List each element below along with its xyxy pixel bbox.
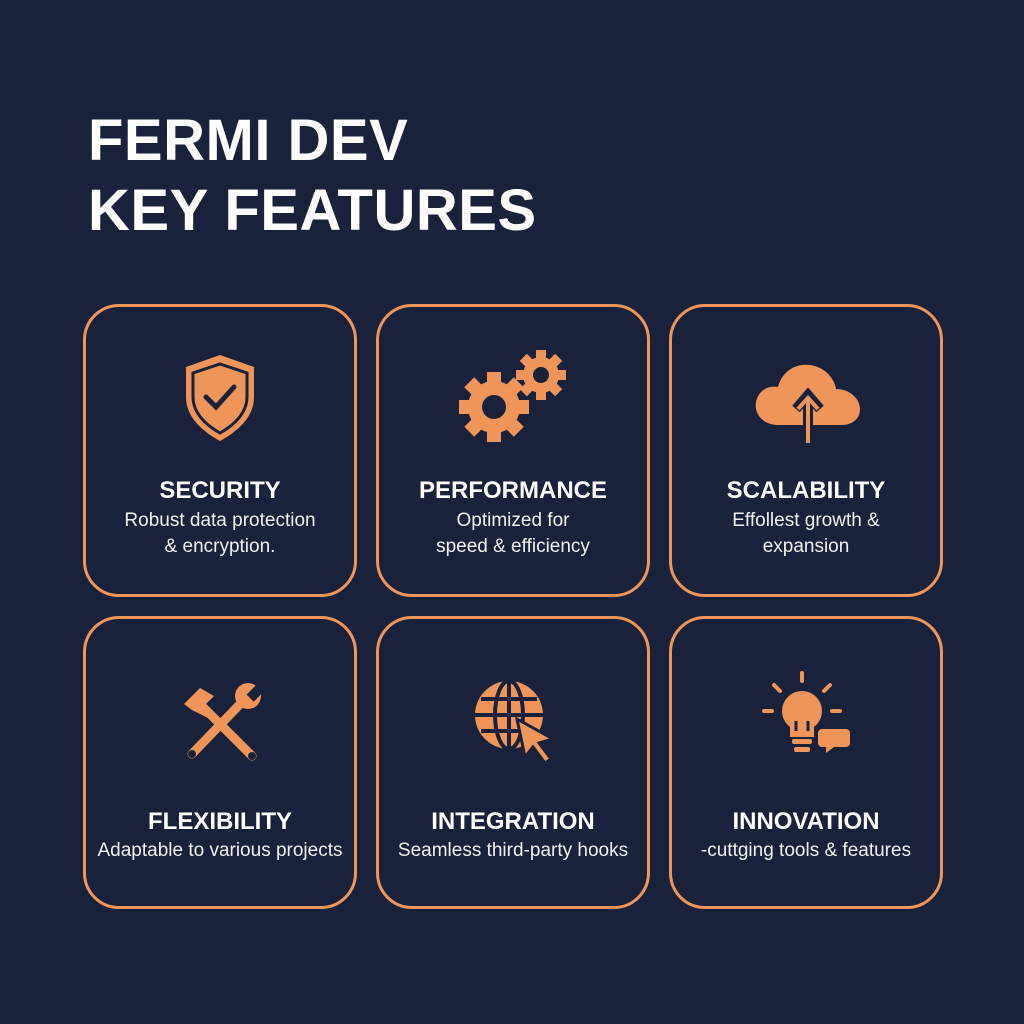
panel: integration	[376, 616, 650, 909]
icon: tools	[184, 683, 261, 760]
description: Seamless third-party hooks	[398, 840, 628, 861]
icon: shield	[186, 355, 254, 441]
description	[436, 510, 590, 557]
description: -cuttging tools & features	[701, 840, 911, 861]
description: Adaptable to various projects	[97, 840, 343, 861]
heading: INTEGRATION	[431, 808, 595, 835]
title: FERMI DEV	[88, 108, 408, 173]
description: Effollest growth &	[732, 510, 880, 531]
heading: SECURITY	[159, 477, 281, 504]
panel: scalability	[669, 304, 943, 597]
icon: globe cursor	[475, 682, 549, 761]
description: & encryption.	[165, 536, 275, 557]
description	[124, 510, 316, 557]
panel: innovation	[669, 616, 943, 909]
description: expansion	[763, 536, 849, 557]
description	[732, 510, 880, 557]
panel: performance	[376, 304, 650, 597]
heading: PERFORMANCE	[419, 477, 607, 504]
description: Robust data protection	[124, 510, 316, 531]
title: KEY FEATURES	[88, 178, 537, 243]
description: Optimized for	[456, 510, 569, 531]
icon: gears	[459, 350, 566, 442]
icon: cloud upload	[756, 364, 860, 443]
icon: lightbulb	[762, 671, 850, 753]
panel: flexibility	[83, 616, 357, 909]
description: speed & efficiency	[436, 536, 590, 557]
heading: INNOVATION	[732, 808, 880, 835]
title	[88, 108, 537, 243]
panel: security	[83, 304, 357, 597]
heading: FLEXIBILITY	[148, 808, 292, 835]
heading: SCALABILITY	[727, 477, 885, 504]
